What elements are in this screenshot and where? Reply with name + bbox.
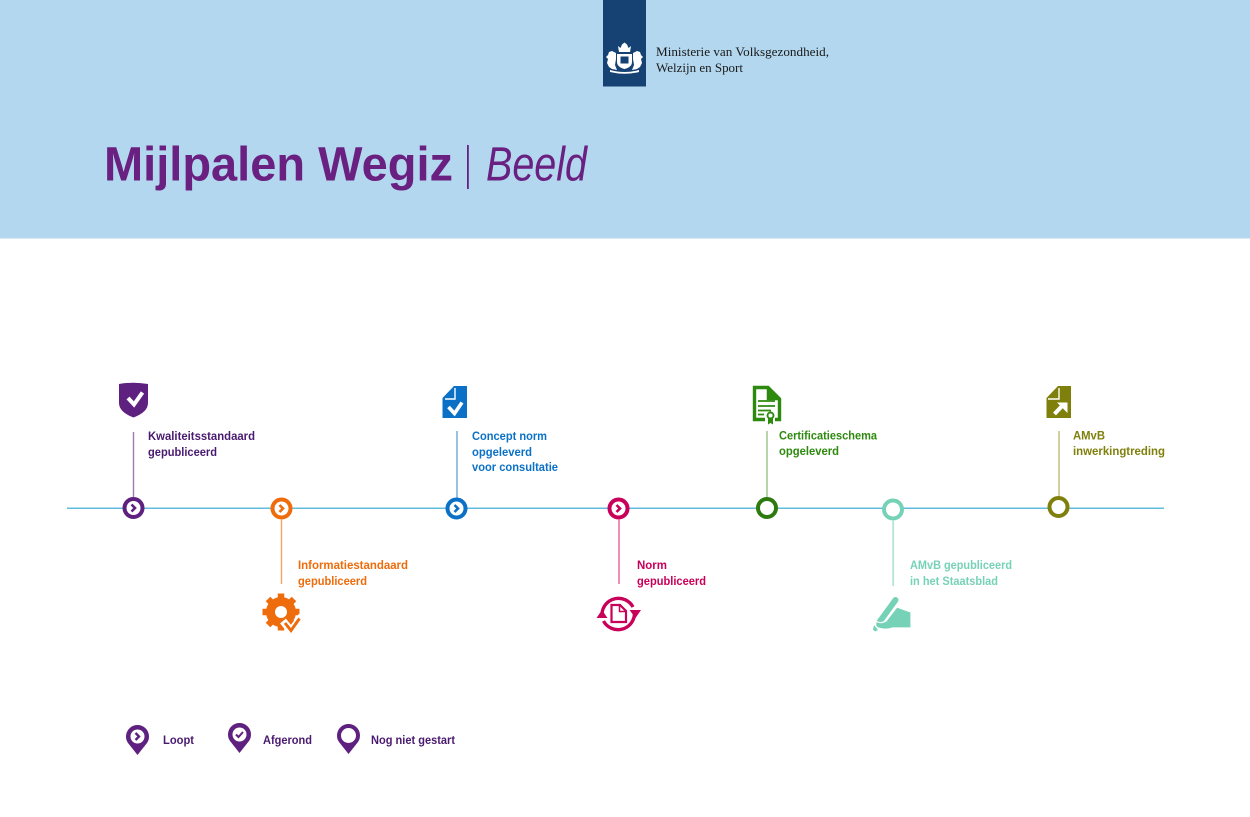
logo: ministry emblem ribbon: [603, 0, 646, 86]
label: gepubliceerd: [637, 574, 706, 588]
label: [298, 558, 408, 588]
milestone: Informatiestandaard gepubliceerd: [262, 500, 408, 631]
label: opgeleverd: [472, 445, 532, 459]
label: gepubliceerd: [298, 574, 367, 588]
status marker: in progress: [272, 500, 290, 518]
label: in het Staatsblad: [910, 574, 998, 588]
connector line: [618, 519, 620, 584]
icon: certificate document: [754, 388, 780, 424]
label: inwerkingtreding: [1073, 444, 1165, 458]
legend: [126, 723, 455, 755]
milestone: AMvB gepubliceerd in het Staatsblad: [873, 500, 1012, 632]
label: [637, 558, 706, 588]
status marker: not started: [1050, 498, 1068, 516]
icon: document with arrow: [1046, 386, 1071, 418]
icon: refresh with document: [596, 598, 641, 630]
milestone: Concept norm opgeleverd voor consultatie: [442, 386, 558, 518]
connector line: [1058, 431, 1060, 498]
icon: shield with check: [119, 383, 148, 418]
label: [472, 429, 558, 474]
connector line: [133, 432, 134, 498]
connector line: [456, 431, 458, 498]
label: voor consultatie: [472, 460, 558, 474]
label: AMvB: [1073, 428, 1105, 442]
status marker: in progress: [448, 500, 466, 518]
header band: [0, 0, 1250, 238]
connector line: [281, 519, 282, 584]
ministry name: [656, 45, 829, 75]
label: [910, 558, 1012, 588]
label: opgeleverd: [779, 444, 839, 458]
milestone: AMvB inwerkingtreding: [1046, 386, 1165, 516]
icon: gear with check: [262, 594, 302, 631]
label: Informatiestandaard: [298, 558, 408, 572]
title: Mijlpalen Wegiz: [104, 138, 453, 192]
icon: hand writing with pen: [873, 600, 911, 632]
legend item: Afgerond: Afgerond: [263, 733, 312, 747]
legend item: Afgerond: [228, 723, 312, 753]
label: Norm: [637, 558, 667, 572]
label: Kwaliteitsstandaard: [148, 429, 255, 443]
label: AMvB gepubliceerd: [910, 558, 1012, 572]
status marker: not started: [758, 499, 776, 517]
label: [779, 428, 877, 458]
legend item: Nog niet gestart: [337, 724, 455, 754]
status marker: in progress: [610, 500, 628, 518]
milestone: Kwaliteitsstandaard gepubliceerd: [119, 383, 255, 517]
milestone: Norm gepubliceerd: [596, 500, 706, 630]
label: Certificatieschema: [779, 428, 877, 442]
label: [148, 429, 255, 459]
label: [1073, 428, 1165, 458]
label: gepubliceerd: [148, 445, 217, 459]
connector line: [766, 431, 768, 498]
timeline axis: [67, 508, 1164, 509]
ministry name: Ministerie van Volksgezondheid,: [656, 45, 829, 59]
legend item: Loopt: Loopt: [163, 733, 194, 747]
ministry name: Welzijn en Sport: [656, 61, 744, 75]
legend item: Nog niet gestart: Nog niet gestart: [371, 733, 455, 747]
label: Concept norm: [472, 429, 547, 443]
status marker: not started: [884, 500, 902, 518]
icon: document with check: [442, 386, 467, 418]
legend item: Loopt: [126, 725, 194, 755]
milestone: Certificatieschema opgeleverd: [754, 388, 877, 517]
connector line: [892, 520, 894, 586]
title: Beeld: [486, 138, 588, 192]
status marker: in progress: [124, 499, 142, 517]
